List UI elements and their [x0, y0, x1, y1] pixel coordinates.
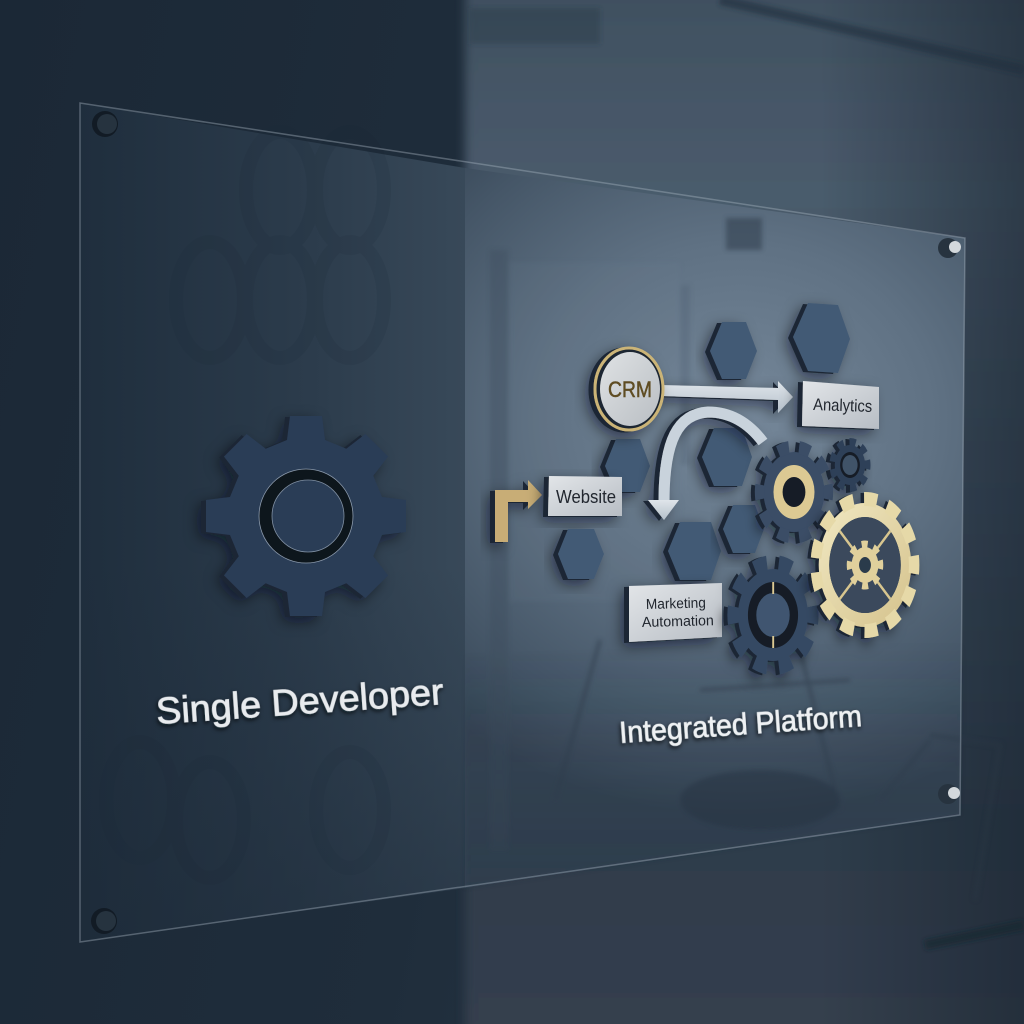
hexagon 4: [702, 428, 752, 486]
node: Analytics: Analytics: [813, 395, 872, 416]
hexagon 5: [558, 529, 604, 579]
arrow: gold elbow: [495, 480, 542, 542]
node: CRM: CRM: [608, 377, 652, 402]
icon: large gold gear: [816, 499, 914, 631]
glass panel: [80, 103, 1000, 942]
faint left pattern: [106, 132, 384, 878]
integrated platform cluster: [495, 303, 914, 667]
hexagon 7: [723, 505, 764, 553]
hexagon 3: [605, 439, 650, 492]
heading: Single Developer: Single Developer: [155, 671, 445, 732]
icon: gear with gold ring: [760, 447, 828, 537]
icon: single large gear: [206, 416, 406, 616]
node: Analytics: [802, 381, 879, 429]
node: Marketing Automation: Marketing: [646, 595, 706, 613]
arrow: CRM to Analytics: [660, 381, 793, 413]
node: Marketing Automation: [629, 583, 722, 642]
hexagon 6: [668, 522, 721, 580]
icon: bolt bottom left: [91, 908, 117, 934]
icon: lower dark gear: [733, 563, 813, 667]
hexagon 2: [793, 303, 850, 373]
arrow: curved down: [648, 412, 763, 520]
node: Website: Website: [556, 487, 616, 507]
node: Website: [548, 476, 622, 516]
heading: Integrated Platform: Integrated Platform: [618, 698, 863, 750]
icon: bolt top left: [92, 111, 118, 137]
node: CRM: [595, 348, 663, 430]
icon: small dark gear: [833, 442, 867, 488]
icon: bolt bottom right: [938, 784, 960, 804]
hexagon 1: [710, 322, 757, 379]
node: Marketing Automation: Automation: [642, 613, 714, 631]
room reflection: [465, 218, 1000, 900]
icon: bolt top right: [938, 238, 961, 258]
